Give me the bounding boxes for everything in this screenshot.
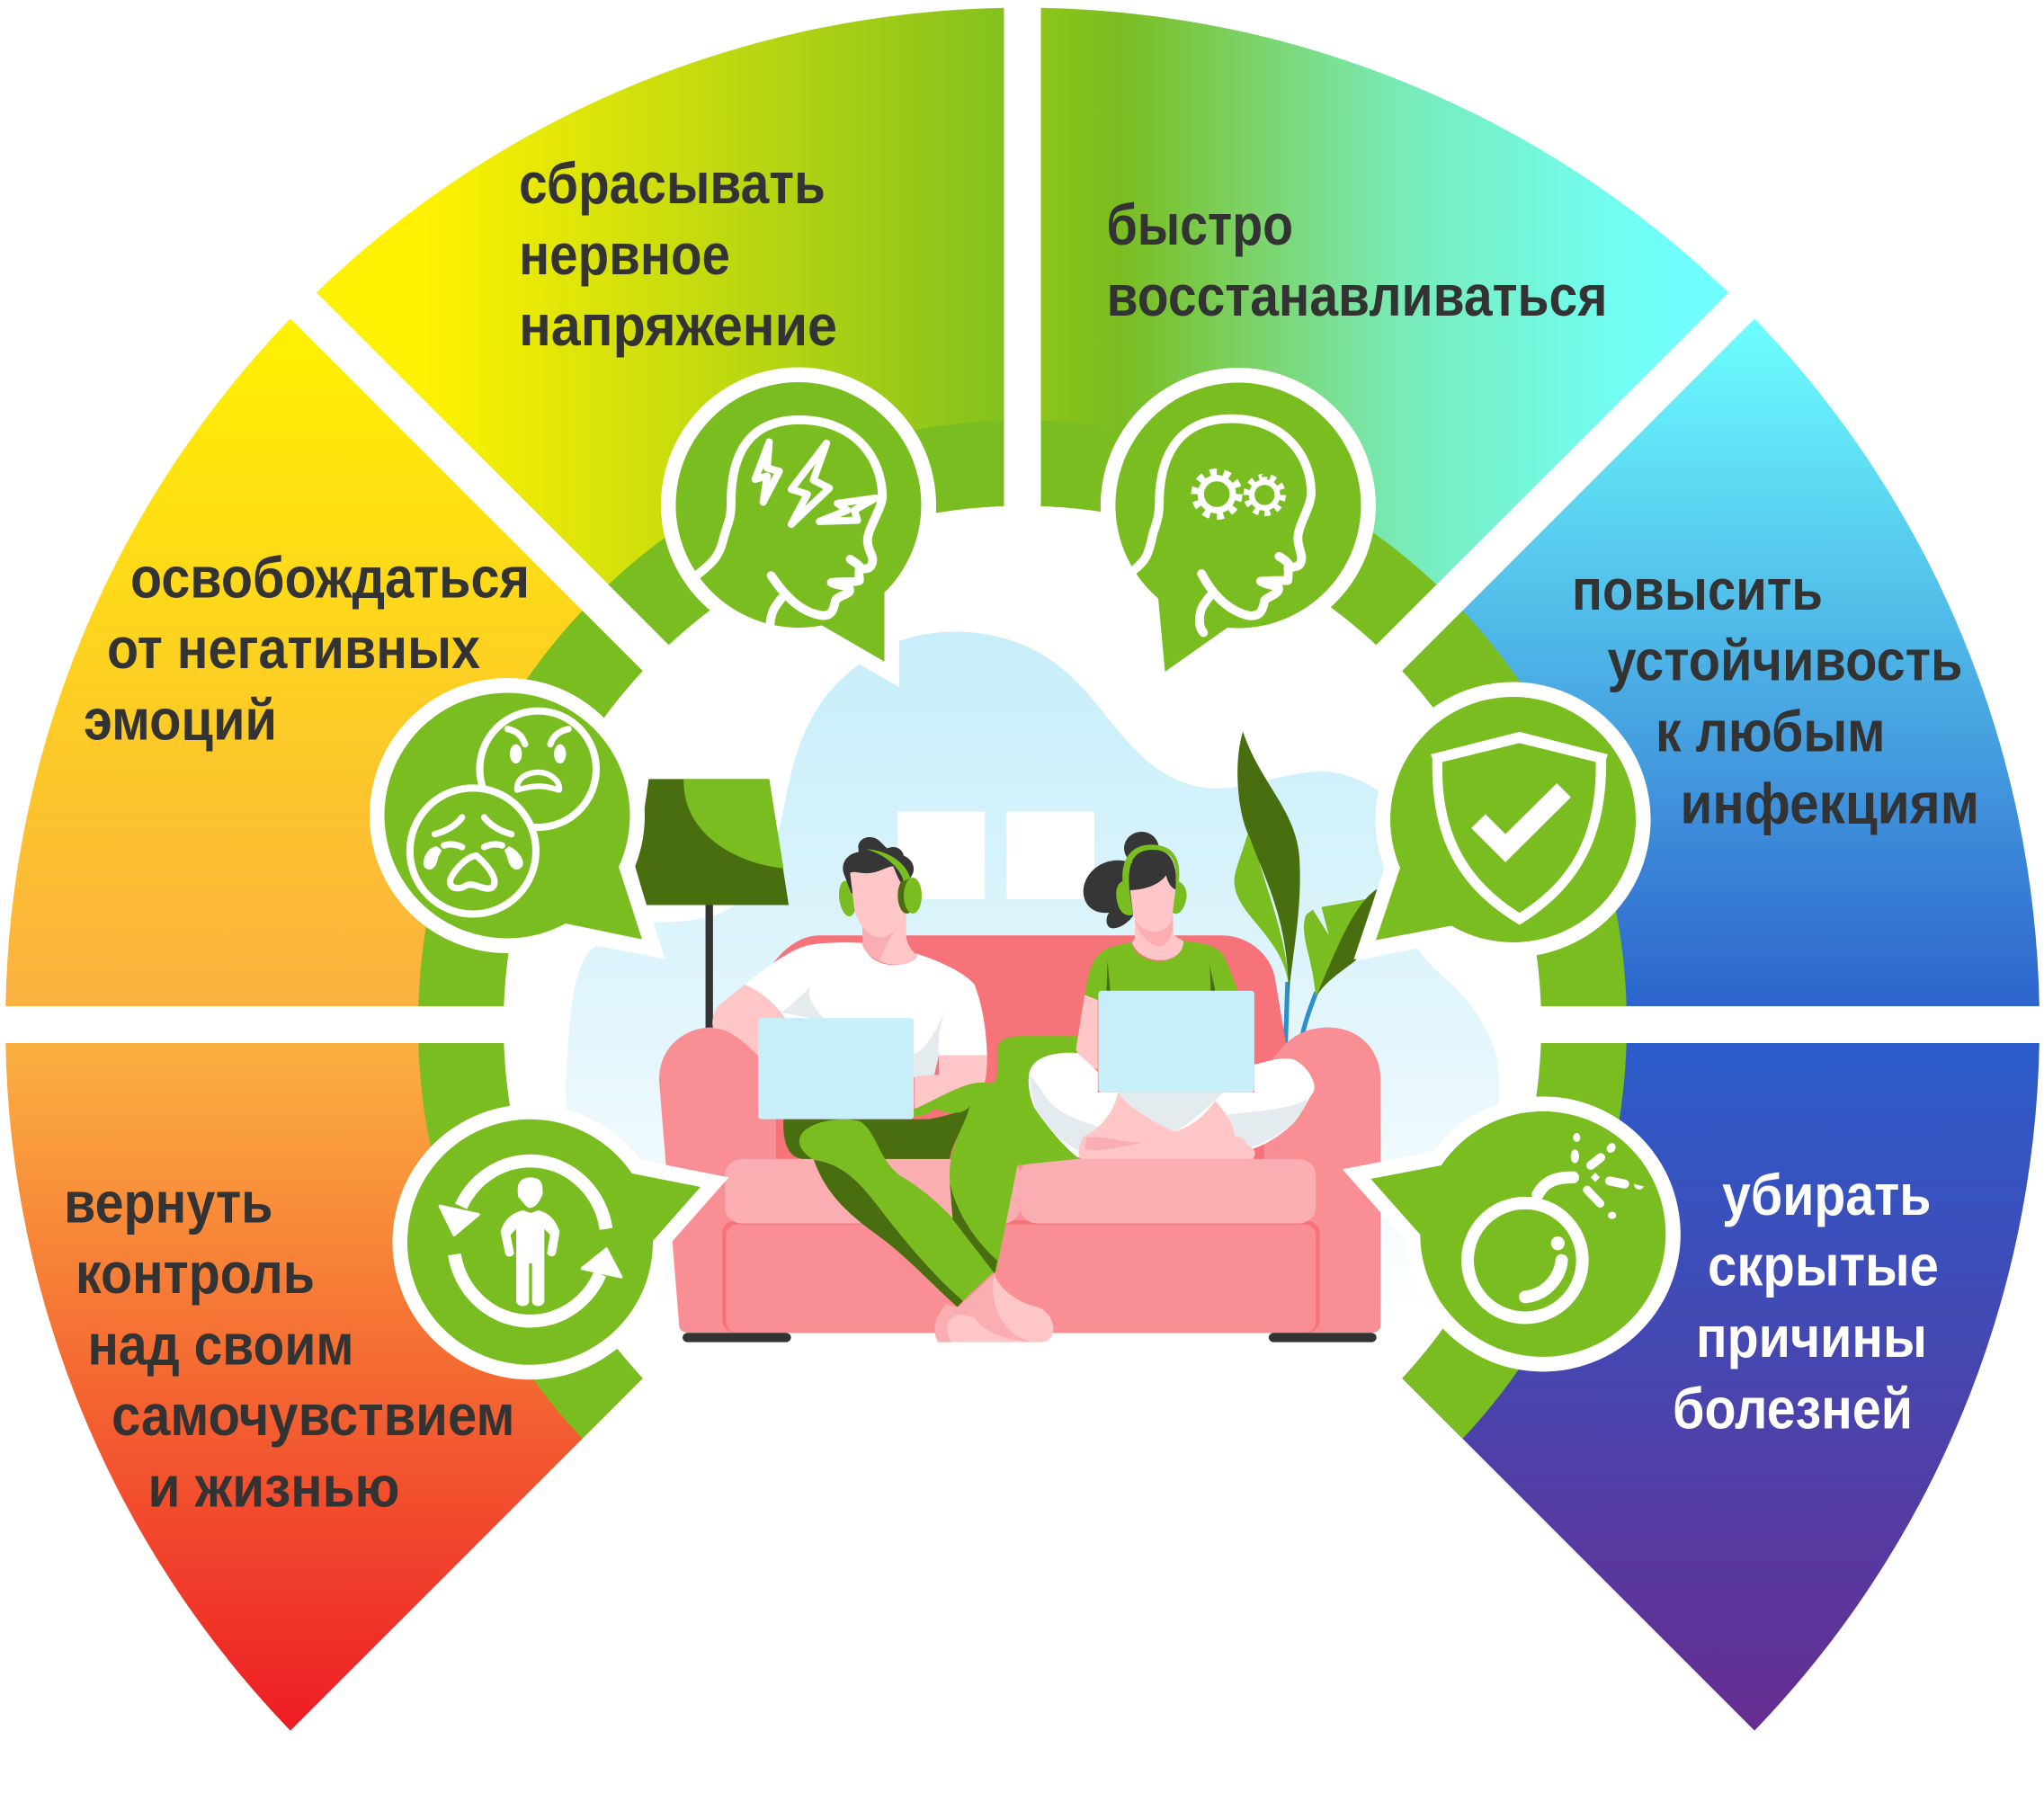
text: release nervous tension: напряжение [519,293,837,358]
bubble: shield [1376,697,1636,942]
text: free from negative emotions: освобождаться [130,545,530,610]
bubble: head with lightning [675,382,921,662]
text: release nervous tension [519,151,837,358]
text: regain control of wellbeing and life: и жизнью [147,1455,399,1520]
text: free from negative emotions: эмоций [84,687,277,752]
text: remove hidden causes of illness: убирать [1722,1163,1932,1227]
text: recover quickly: быстро [1106,192,1293,257]
text: regain control of wellbeing and life: над своим [88,1313,354,1378]
sector: regain control [5,1043,978,1731]
bubble: person in cycle [407,1120,701,1365]
sector: remove hidden causes [1067,1043,2040,1731]
man head with headphones [837,837,922,965]
illustration: couple on sofa with laptops [566,632,1499,1343]
text: remove hidden causes of illness: скрытые [1708,1234,1939,1298]
text: raise resistance to infections: устойчивость [1608,628,1962,692]
text: free from negative emotions: от негативных [107,616,480,681]
text: regain control of wellbeing and life [64,1171,514,1520]
text: remove hidden causes of illness [1673,1163,1939,1441]
text: regain control of wellbeing and life: контроль [76,1241,315,1306]
text: regain control of wellbeing and life: вернуть [64,1171,273,1236]
text: recover quickly [1106,192,1608,328]
green ring [460,463,1584,1586]
sector: free from negative emotions [5,318,978,1006]
text: raise resistance to infections: повысить [1572,558,1823,622]
text: release nervous tension: нервное [519,222,730,287]
icon: head with gears [1133,419,1311,633]
icon: person with circular arrows [440,1161,621,1321]
icon: bomb with sparks [1468,1133,1644,1317]
text: regain control of wellbeing and life: самочувствием [112,1383,514,1448]
text: recover quickly: восстанавливаться [1106,263,1608,328]
sector: release nervous tension [317,8,1004,980]
windows [897,812,1094,899]
sector: recover quickly [1041,8,1728,980]
bubble: bomb [1370,1111,1665,1357]
bubble: emotions [384,692,642,940]
icon: head with lightning bolts [698,420,882,625]
sofa [659,935,1380,1343]
woman head with headphones [1084,832,1187,960]
plant [1235,732,1379,1049]
man body [712,942,1077,1343]
text: remove hidden causes of illness: болезней [1673,1376,1913,1441]
floor lamp [635,779,789,1029]
text: free from negative emotions [84,545,530,752]
text: release nervous tension: сбрасывать [519,151,826,216]
text: raise resistance to infections [1572,558,1979,836]
text: remove hidden causes of illness: причины [1696,1305,1927,1369]
background blob [566,632,1499,1333]
icon: angry and crying faces [410,711,596,914]
text: raise resistance to infections: инфекциям [1680,772,1979,836]
icon: shield with check mark [1431,732,1608,925]
bubble: head with gears [1115,383,1361,672]
woman body [1029,941,1315,1159]
text: raise resistance to infections: к любым [1656,700,1885,764]
sector: raise resistance [1067,318,2040,1006]
